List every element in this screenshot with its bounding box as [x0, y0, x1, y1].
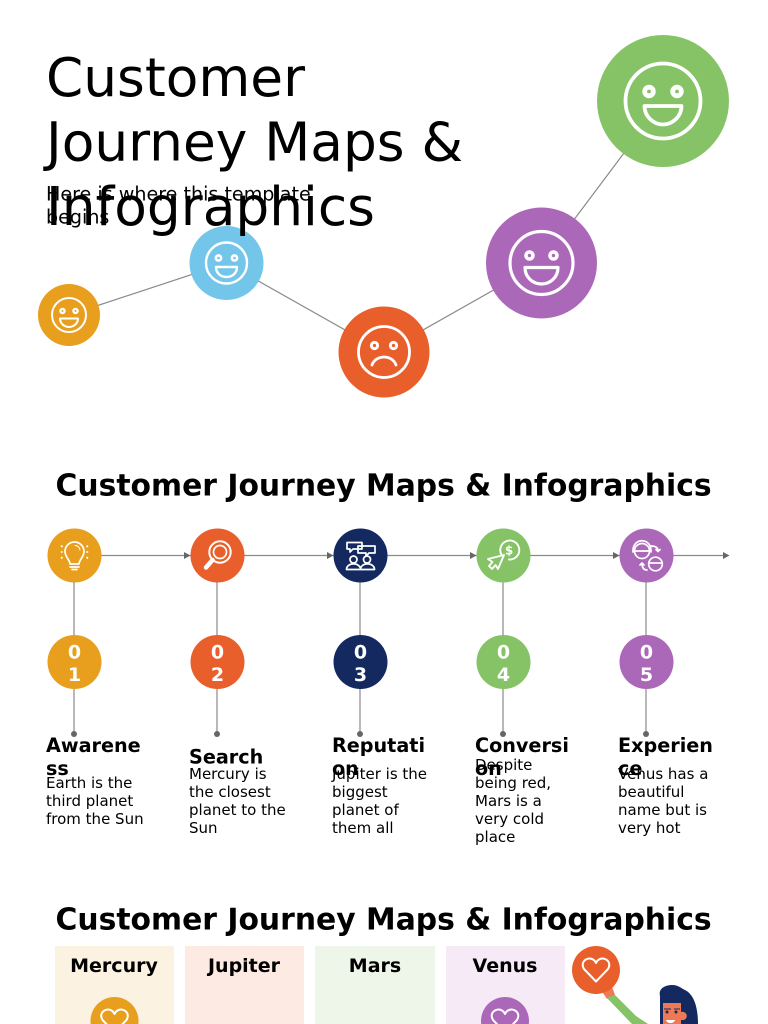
step 4 text: being red, — [475, 774, 551, 792]
smiley node: blue — [190, 226, 264, 300]
face — [663, 1003, 687, 1024]
icon: people talking — [334, 528, 388, 582]
step 5 text: name but is — [618, 801, 707, 819]
step 2 text: the closest — [189, 783, 271, 801]
number 02: 0 — [211, 642, 224, 664]
subtitle: Here is where this template — [46, 182, 311, 206]
card: Mars — [315, 946, 435, 1024]
step 4 text: place — [475, 828, 515, 846]
step 5 text: Experien — [618, 734, 713, 757]
step 1 text: ss — [46, 757, 69, 780]
step 1 text: from the Sun — [46, 810, 144, 828]
card: Jupiter: Jupiter — [206, 955, 281, 977]
step 3 text: Reputati — [332, 734, 425, 757]
number 02 — [190, 635, 244, 689]
number 01: 0 — [68, 642, 81, 664]
title: Infographics — [46, 175, 375, 238]
card: Jupiter — [185, 946, 304, 1024]
card: Mars: Mars — [349, 955, 401, 977]
number 05: 5 — [640, 664, 653, 686]
face details — [664, 1009, 680, 1023]
number 04: 0 — [497, 642, 510, 664]
number 04 — [476, 635, 530, 689]
step 4 text: very cold — [475, 810, 544, 828]
step 3 text: Jupiter is the — [331, 765, 427, 783]
step 5 text: beautiful — [618, 783, 684, 801]
timeline arrow line — [74, 552, 730, 559]
step 4 text: Conversi — [475, 734, 569, 757]
step 3 text — [331, 734, 427, 837]
journey connector line — [69, 101, 663, 352]
icon: heart badge — [572, 946, 620, 994]
card: Mercury: Mercury — [70, 955, 158, 977]
step 2 text: Sun — [189, 819, 218, 837]
hair — [660, 985, 698, 1024]
hand — [603, 984, 615, 999]
step 1 text — [46, 734, 144, 828]
step 4 text — [475, 734, 569, 846]
number 02: 2 — [211, 664, 224, 686]
number 03: 0 — [354, 642, 367, 664]
card: Venus: Venus — [473, 955, 537, 977]
number 01: 1 — [68, 664, 81, 686]
step 2 text: Search — [189, 746, 263, 768]
step 5 text: Venus has a — [618, 765, 708, 783]
icon: cursor and dollar — [476, 528, 530, 582]
smiley node: orange — [38, 284, 100, 346]
section heading: cards: Customer Journey Maps & Infographics — [56, 902, 712, 938]
subtitle: begins — [46, 206, 109, 228]
number 05: 0 — [640, 642, 653, 664]
step 4 text: Mars is a — [475, 792, 542, 810]
number 03: 3 — [354, 664, 367, 686]
step 3 text: on — [332, 757, 359, 780]
step 5 text: ce — [618, 757, 642, 780]
icon: customer support exchange — [620, 528, 674, 582]
vertical stems — [71, 555, 649, 737]
arm — [606, 995, 648, 1024]
icon: cursor and dollar: $ — [505, 544, 513, 558]
step 3 text: them all — [332, 819, 394, 837]
title: Journey Maps & — [43, 110, 463, 174]
step 5 text — [618, 734, 713, 837]
icon: magnifier — [190, 528, 244, 582]
sad node: red — [338, 306, 430, 398]
step 3 text: planet of — [332, 801, 399, 819]
smiley node: green — [597, 35, 729, 167]
step 5 text: very hot — [618, 819, 681, 837]
section heading: process: Customer Journey Maps & Infographics — [56, 468, 712, 504]
number 04: 4 — [497, 664, 510, 686]
number 01 — [48, 635, 102, 689]
icon: light bulb — [48, 528, 102, 582]
card: Mercury — [55, 946, 174, 1024]
card: Venus — [446, 946, 565, 1024]
smiley node: purple — [486, 208, 597, 318]
step 2 text: Mercury is — [189, 765, 267, 783]
number 05 — [620, 635, 674, 689]
illustration: person holding heart — [572, 946, 698, 1024]
step 4 text: on — [475, 757, 502, 780]
step 1 text: Earth is the — [46, 774, 132, 792]
step 4 text: Despite — [475, 756, 532, 774]
number 03 — [334, 635, 388, 689]
step 2 text: planet to the — [189, 801, 286, 819]
step 1 text: third planet — [46, 792, 133, 810]
step 2 text — [189, 746, 286, 837]
step 3 text: biggest — [332, 783, 388, 801]
step 1 text: Awarene — [46, 734, 141, 757]
title: Customer — [46, 46, 305, 109]
